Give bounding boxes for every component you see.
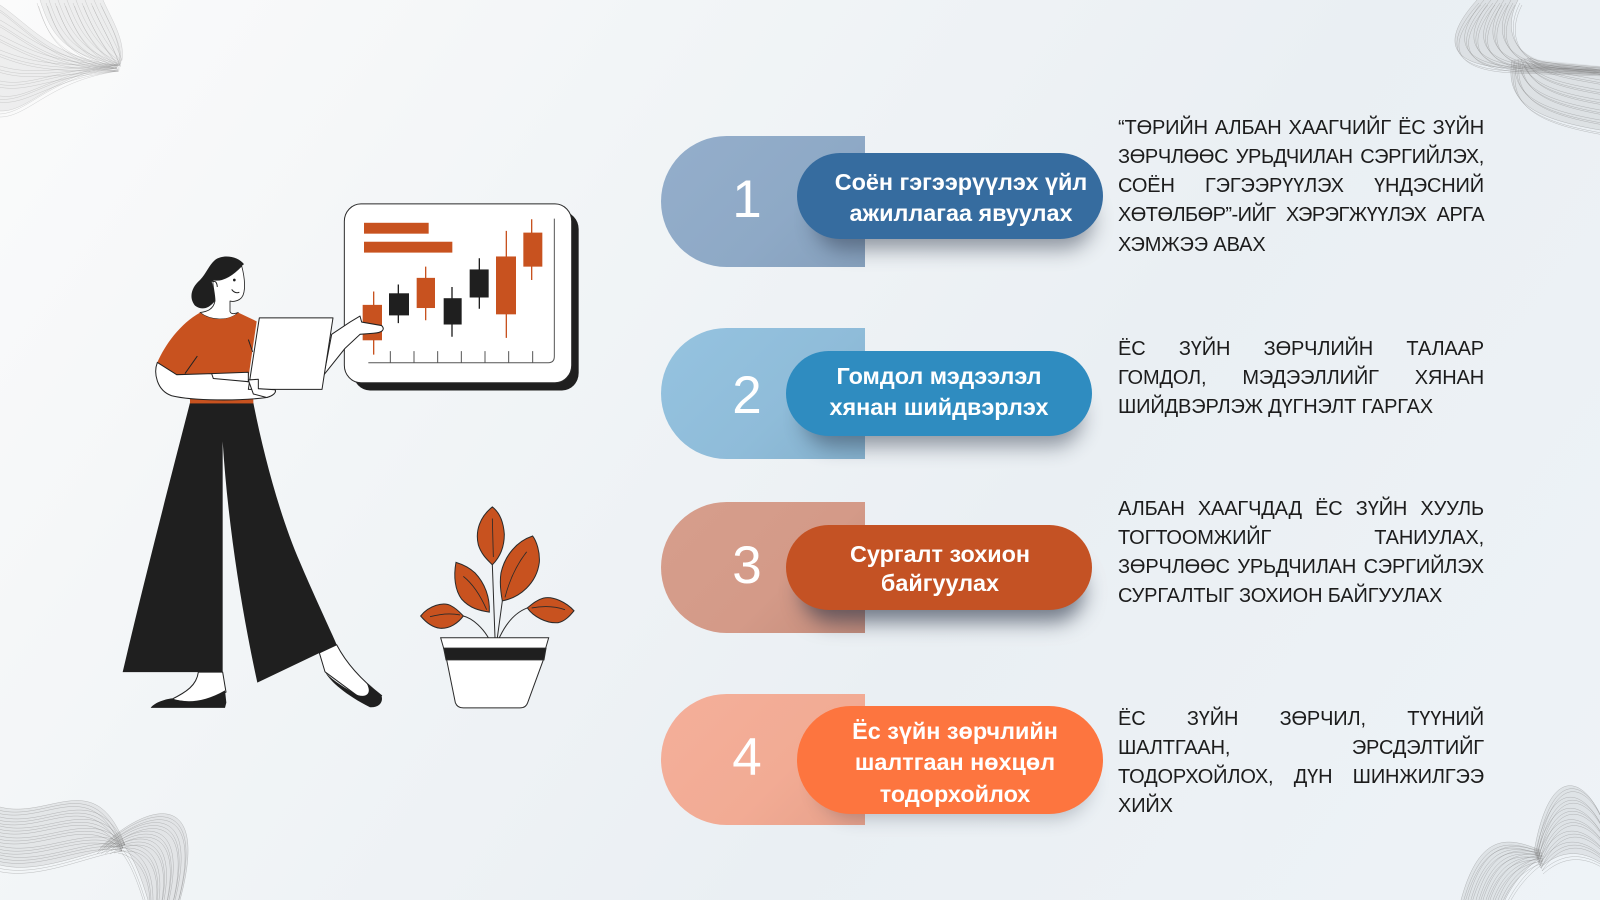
pill text: байгуулах [881, 570, 999, 596]
pill text: Гомдол мэдээлэл [836, 363, 1042, 389]
panel: step 2 [661, 328, 1094, 460]
description 1 [1118, 116, 1484, 256]
pill: step 3 title [786, 525, 1092, 610]
description 3: ТОГТООМЖИЙГ ТАНИУЛАХ, [1118, 527, 1484, 549]
number 1: 1 [732, 170, 762, 229]
pill text [829, 363, 1048, 420]
tab 1 [661, 136, 865, 267]
pill text: Ёс зүйн зөрчлийн [852, 718, 1058, 744]
description 1: “ТӨРИЙН АЛБАН ХААГЧИЙГ ЁС ЗҮЙН [1118, 117, 1484, 139]
number 4: 4 [732, 728, 762, 787]
wave: top right [1455, 0, 1600, 135]
pill text [850, 541, 1030, 596]
plant in pot [421, 507, 574, 708]
description 1: ХЭМЖЭЭ АВАХ [1118, 234, 1266, 256]
description 3: ЗӨРЧЛӨӨС УРЬДЧИЛАН СЭРГИЙЛЭХ [1118, 556, 1484, 578]
number 2: 2 [732, 366, 762, 425]
description 3: СУРГАЛТЫГ ЗОХИОН БАЙГУУЛАХ [1118, 585, 1442, 607]
woman [123, 256, 383, 708]
description 4: ТОДОРХОЙЛОХ, ДҮН ШИНЖИЛГЭЭ [1118, 766, 1484, 788]
description 3 [1118, 496, 1484, 607]
wave: bottom right [1461, 786, 1600, 900]
pill text: Соён гэгээрүүлэх үйл [835, 169, 1087, 195]
tab 4 [661, 694, 865, 825]
description 1: СОЁН ГЭГЭЭРҮҮЛЭХ ҮНДЭСНИЙ [1118, 175, 1484, 197]
pill text: хянан шийдвэрлэх [829, 394, 1048, 420]
description 2: ШИЙДВЭРЛЭЖ ДҮГНЭЛТ ГАРГАХ [1118, 396, 1433, 418]
number 3: 3 [732, 536, 762, 595]
description 4: ЁС ЗҮЙН ЗӨРЧИЛ, ТҮҮНИЙ [1118, 708, 1484, 730]
pill text: Сургалт зохион [850, 541, 1030, 567]
description 3: АЛБАН ХААГЧДАД ЁС ЗҮЙН ХУУЛЬ [1118, 498, 1484, 520]
chart board [344, 204, 579, 390]
panel: step 4 [661, 694, 1103, 828]
tab 3 [661, 502, 865, 633]
description 2: ГОМДОЛ, МЭДЭЭЛЛИЙГ ХЯНАН [1118, 367, 1484, 389]
panel: step 1 [661, 136, 1106, 267]
description 1: ЗӨРЧЛӨӨС УРЬДЧИЛАН СЭРГИЙЛЭХ, [1118, 146, 1484, 168]
pill text: тодорхойлох [880, 781, 1030, 807]
wave: bottom left [0, 801, 188, 900]
pill text [852, 718, 1058, 807]
pill: step 2 title [786, 351, 1092, 436]
panel: step 3 [661, 502, 1098, 637]
description 1: ХӨТӨЛБӨР”-ИЙГ ХЭРЭГЖҮҮЛЭХ АРГА [1118, 204, 1484, 226]
wave: top left [0, 0, 122, 117]
pill text: шалтгаан нөхцөл [855, 749, 1055, 775]
pill: step 1 title [797, 153, 1103, 239]
description 4: ШАЛТГААН, ЭРСДЭЛТИЙГ [1118, 737, 1484, 759]
illustration: woman, chart board and plant [122, 203, 579, 708]
pill text: ажиллагаа явуулах [850, 200, 1072, 226]
description 2: ЁС ЗҮЙН ЗӨРЧЛИЙН ТАЛААР [1118, 338, 1484, 360]
description 4 [1118, 706, 1484, 817]
pill text [835, 169, 1087, 226]
description 2 [1118, 336, 1484, 418]
tab 2 [661, 328, 865, 459]
description 4: ХИЙХ [1118, 795, 1173, 817]
pill: step 4 title [797, 706, 1103, 814]
